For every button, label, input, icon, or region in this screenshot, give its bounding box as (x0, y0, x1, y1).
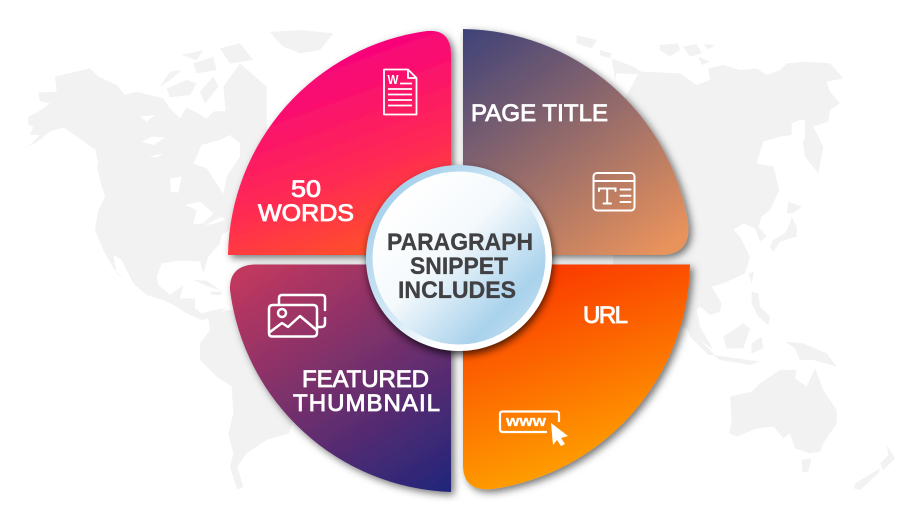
center circle: paragraph snippet includes (366, 165, 552, 351)
center text: SNIPPET (410, 253, 508, 280)
center text (387, 229, 533, 304)
label: featured thumbnail (293, 366, 440, 417)
panel: page title (463, 29, 688, 255)
center text: INCLUDES (398, 277, 516, 304)
quadrant shape: top left (228, 31, 451, 255)
quadrant shape: top right (463, 29, 688, 255)
icon: word document (384, 70, 416, 114)
panel: url (463, 264, 690, 489)
center text: PARAGRAPH (387, 229, 533, 256)
outer ring (366, 165, 552, 351)
panel: 50 words (228, 31, 451, 255)
label: 50 words: WORDS (258, 200, 354, 227)
icon: www cursor: www (505, 413, 546, 430)
icon: title window (594, 173, 634, 210)
label: featured thumbnail: THUMBNAIL (293, 390, 440, 417)
icon: www cursor (500, 412, 568, 446)
icon: word document: W (388, 72, 399, 87)
label: url: URL (583, 302, 628, 329)
label: featured thumbnail: FEATURED (302, 366, 429, 393)
panel: featured thumbnail (230, 264, 451, 492)
icon: images (269, 295, 325, 336)
label: page title: PAGE TITLE (471, 100, 608, 127)
inner disc (372, 172, 546, 344)
label: 50 words (258, 176, 354, 227)
map: Americas (18, 30, 333, 490)
label: 50 words: 50 (291, 176, 321, 203)
quadrant shape: bottom left (230, 264, 451, 492)
map: Asia and Oceania (577, 35, 895, 490)
quadrant shape: bottom right (463, 264, 690, 489)
